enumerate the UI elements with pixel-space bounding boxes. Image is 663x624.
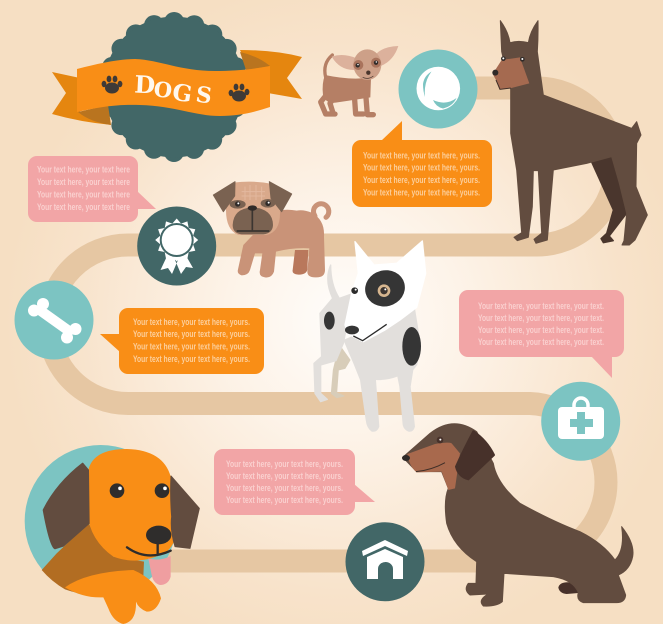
- speech bubble: orange top: Your text here, your text here, yours.: [363, 163, 480, 173]
- speech bubble: pink bottom: Your text here, your text here, yours.: [226, 495, 343, 505]
- speech bubble: pink bottom: Your text here, your text here, yours.: [226, 471, 343, 481]
- dog: chihuahua: [321, 46, 398, 115]
- winding path: [49, 88, 616, 561]
- speech bubble: orange left: [100, 308, 264, 374]
- scalloped seal: [104, 16, 244, 158]
- speech bubble: pink top left: [28, 156, 156, 222]
- title badge: [52, 16, 302, 158]
- speech bubble: orange left: Your text here, your text here, yours.: [133, 354, 250, 364]
- speech bubble: orange top: Your text here, your text here, yours.: [363, 151, 480, 161]
- icon: award rosette: [137, 206, 216, 286]
- speech bubble: pink top left: Your text here, your text here: [37, 177, 130, 187]
- speech bubble: pink bottom: Your text here, your text here, yours.: [226, 459, 343, 469]
- icon: ball: [398, 50, 478, 128]
- title text: S: [194, 82, 213, 110]
- speech bubble: pink right: Your text here, your text here, your text.: [478, 313, 604, 323]
- speech bubble: pink bottom: [214, 449, 375, 515]
- speech bubble: pink top left: Your text here, your text here: [37, 164, 130, 174]
- speech bubble: pink right: Your text here, your text here, your text.: [478, 325, 604, 335]
- icon: left paw: [102, 76, 122, 94]
- speech bubble: orange left: Your text here, your text here, yours.: [133, 329, 250, 339]
- title text: D: [134, 70, 156, 100]
- speech bubble: pink right: [459, 290, 624, 378]
- ribbon band: [77, 59, 270, 116]
- dog: bull terrier: [314, 241, 426, 432]
- icon: right paw: [229, 84, 249, 102]
- title text: [134, 70, 213, 110]
- speech bubble: pink top left: Your text here, your text here: [37, 190, 130, 200]
- ribbon folds: [78, 52, 270, 125]
- title text: G: [170, 79, 194, 108]
- speech bubble: orange top: Your text here, your text here, yours.: [363, 187, 480, 197]
- speech bubble: pink bottom: Your text here, your text here, yours.: [226, 483, 343, 493]
- icon: dog house: [346, 522, 424, 601]
- speech bubble: orange top: Your text here, your text here, yours.: [363, 175, 480, 185]
- speech bubble: pink right: Your text here, your text here, your text.: [478, 301, 604, 311]
- icon: bone: [14, 280, 94, 360]
- speech bubble: orange left: Your text here, your text here, yours.: [133, 342, 250, 352]
- speech bubble: pink top left: Your text here, your text here: [37, 202, 130, 212]
- dog: orange puppy: [25, 445, 199, 624]
- icon: medical kit: [541, 382, 620, 461]
- ribbon tails: [52, 50, 302, 125]
- dog: doberman: [492, 21, 647, 245]
- speech bubble: orange left: Your text here, your text here, yours.: [133, 317, 250, 327]
- dog: pug: [213, 182, 329, 277]
- speech bubble: pink right: Your text here, your text here, your text.: [478, 337, 604, 347]
- title text: O: [152, 76, 174, 103]
- speech bubble: orange top: [352, 121, 492, 207]
- dog: dachshund: [402, 424, 633, 606]
